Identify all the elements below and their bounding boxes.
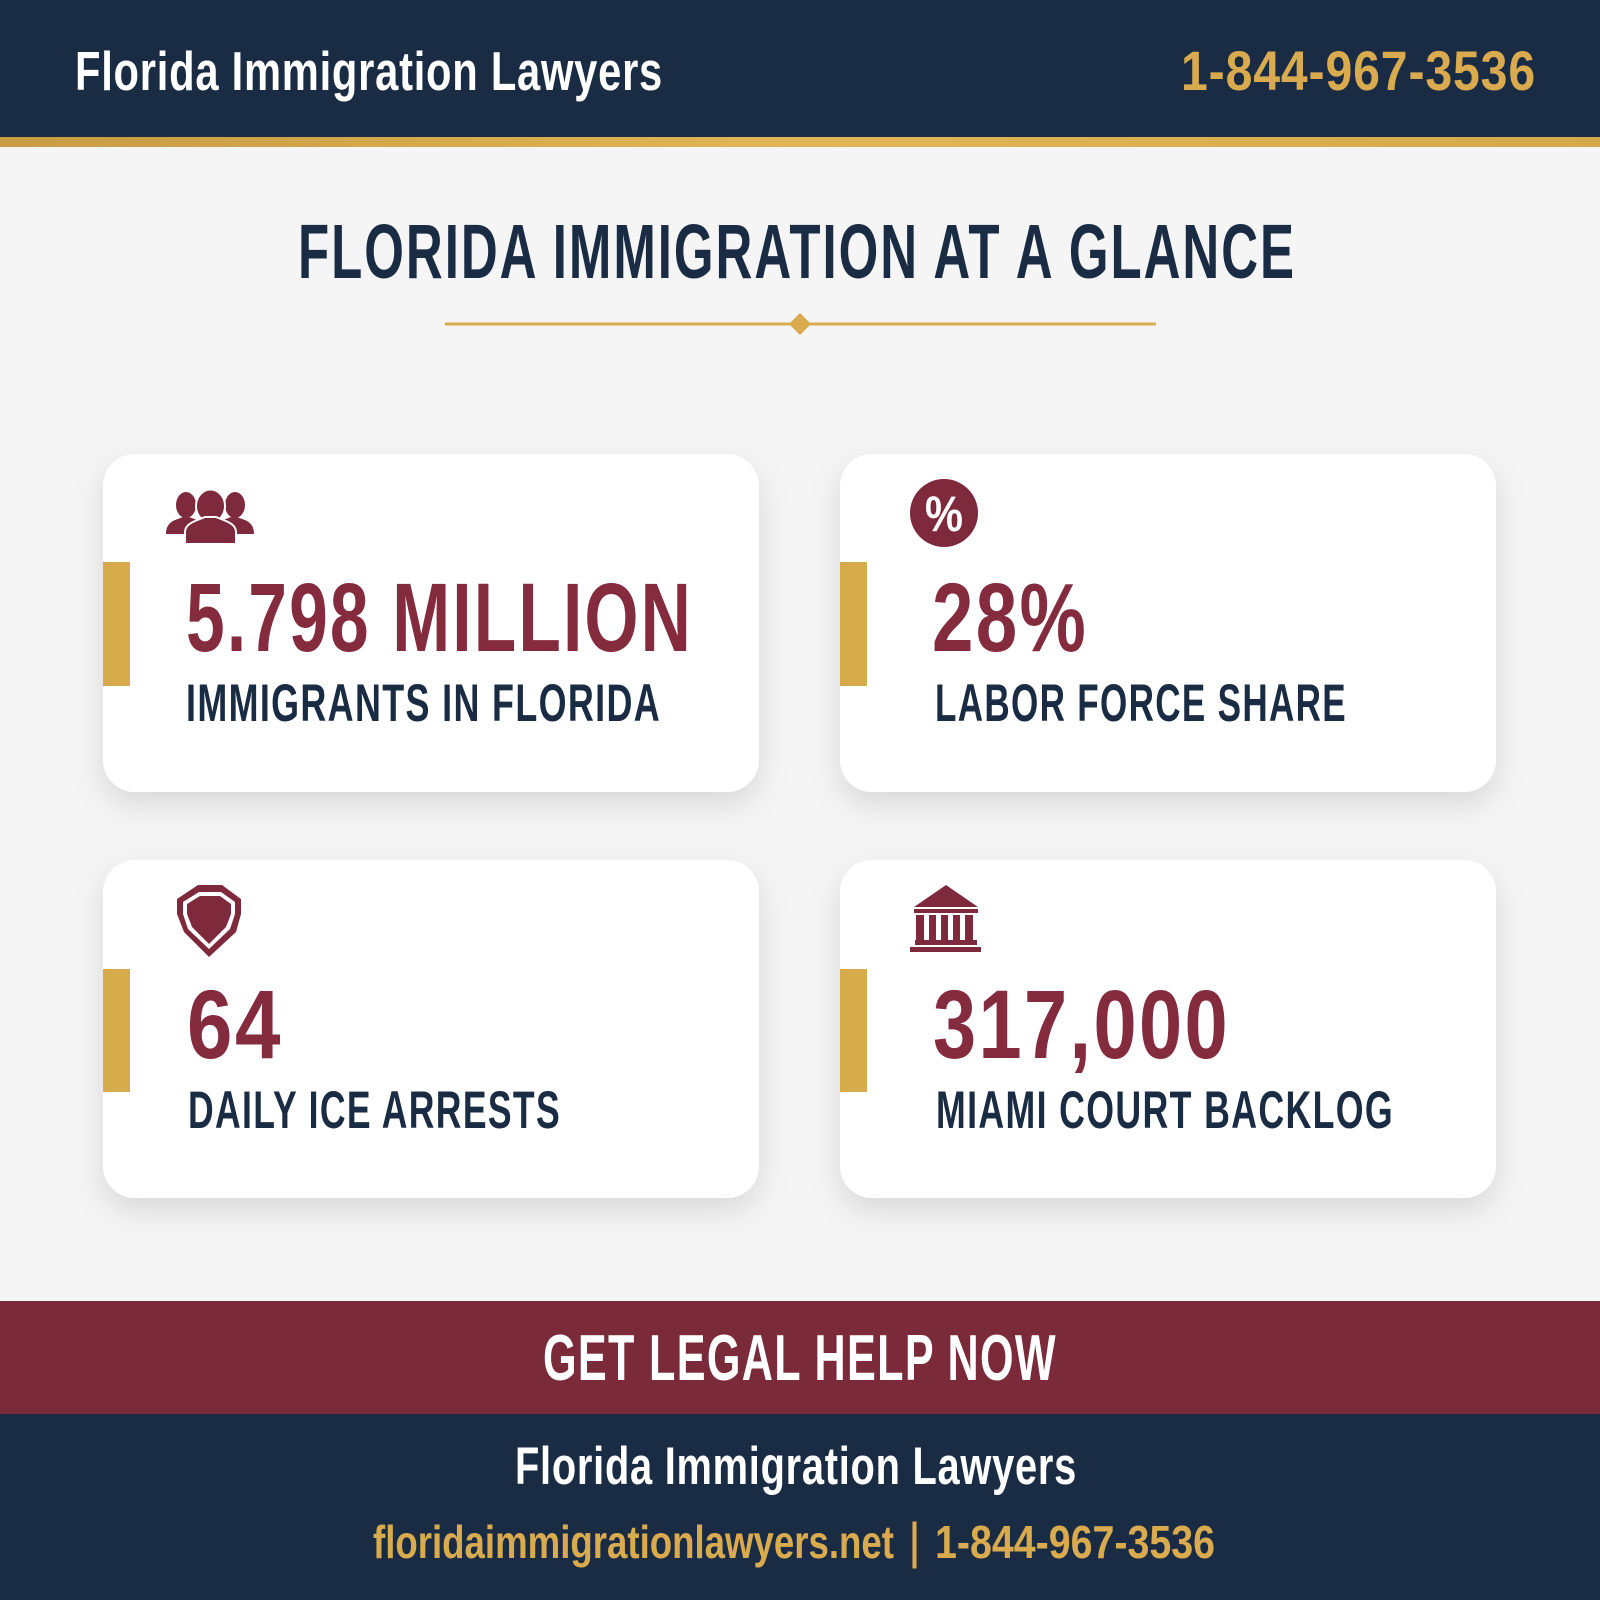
panel: ICE arrests — [103, 860, 759, 1198]
header band — [0, 0, 1600, 147]
stat value: 28% — [932, 563, 1088, 672]
footer contact line: floridaimmigrationlawyers.net — [373, 1516, 894, 1568]
stat label: MIAMI COURT BACKLOG — [936, 1081, 1394, 1140]
stat value: 317,000 — [933, 970, 1230, 1079]
stat label: DAILY ICE ARRESTS — [188, 1081, 561, 1140]
footer band — [0, 1414, 1600, 1600]
header firm name: Florida Immigration Lawyers — [75, 40, 663, 102]
footer firm name: Florida Immigration Lawyers — [515, 1437, 1077, 1496]
icon: percent: % — [925, 486, 963, 542]
icon: percent — [910, 479, 978, 547]
panel: immigrants — [103, 454, 759, 792]
icon: shield — [177, 885, 241, 957]
panel: court backlog — [840, 860, 1496, 1198]
panel: labor force — [840, 454, 1496, 792]
footer contact line: | — [908, 1513, 921, 1569]
stat label: IMMIGRANTS IN FLORIDA — [186, 674, 661, 733]
header phone: 1-844-967-3536 — [1181, 39, 1536, 102]
call to action band — [0, 1301, 1600, 1414]
stat value: 64 — [187, 970, 283, 1079]
icon: courthouse — [910, 885, 981, 952]
footer contact line: 1-844-967-3536 — [935, 1516, 1215, 1568]
icon: people — [166, 490, 254, 544]
stat value: 5.798 MILLION — [186, 563, 693, 672]
call to action text: GET LEGAL HELP NOW — [543, 1321, 1057, 1394]
stat label: LABOR FORCE SHARE — [935, 674, 1347, 733]
title divider — [445, 313, 1156, 335]
